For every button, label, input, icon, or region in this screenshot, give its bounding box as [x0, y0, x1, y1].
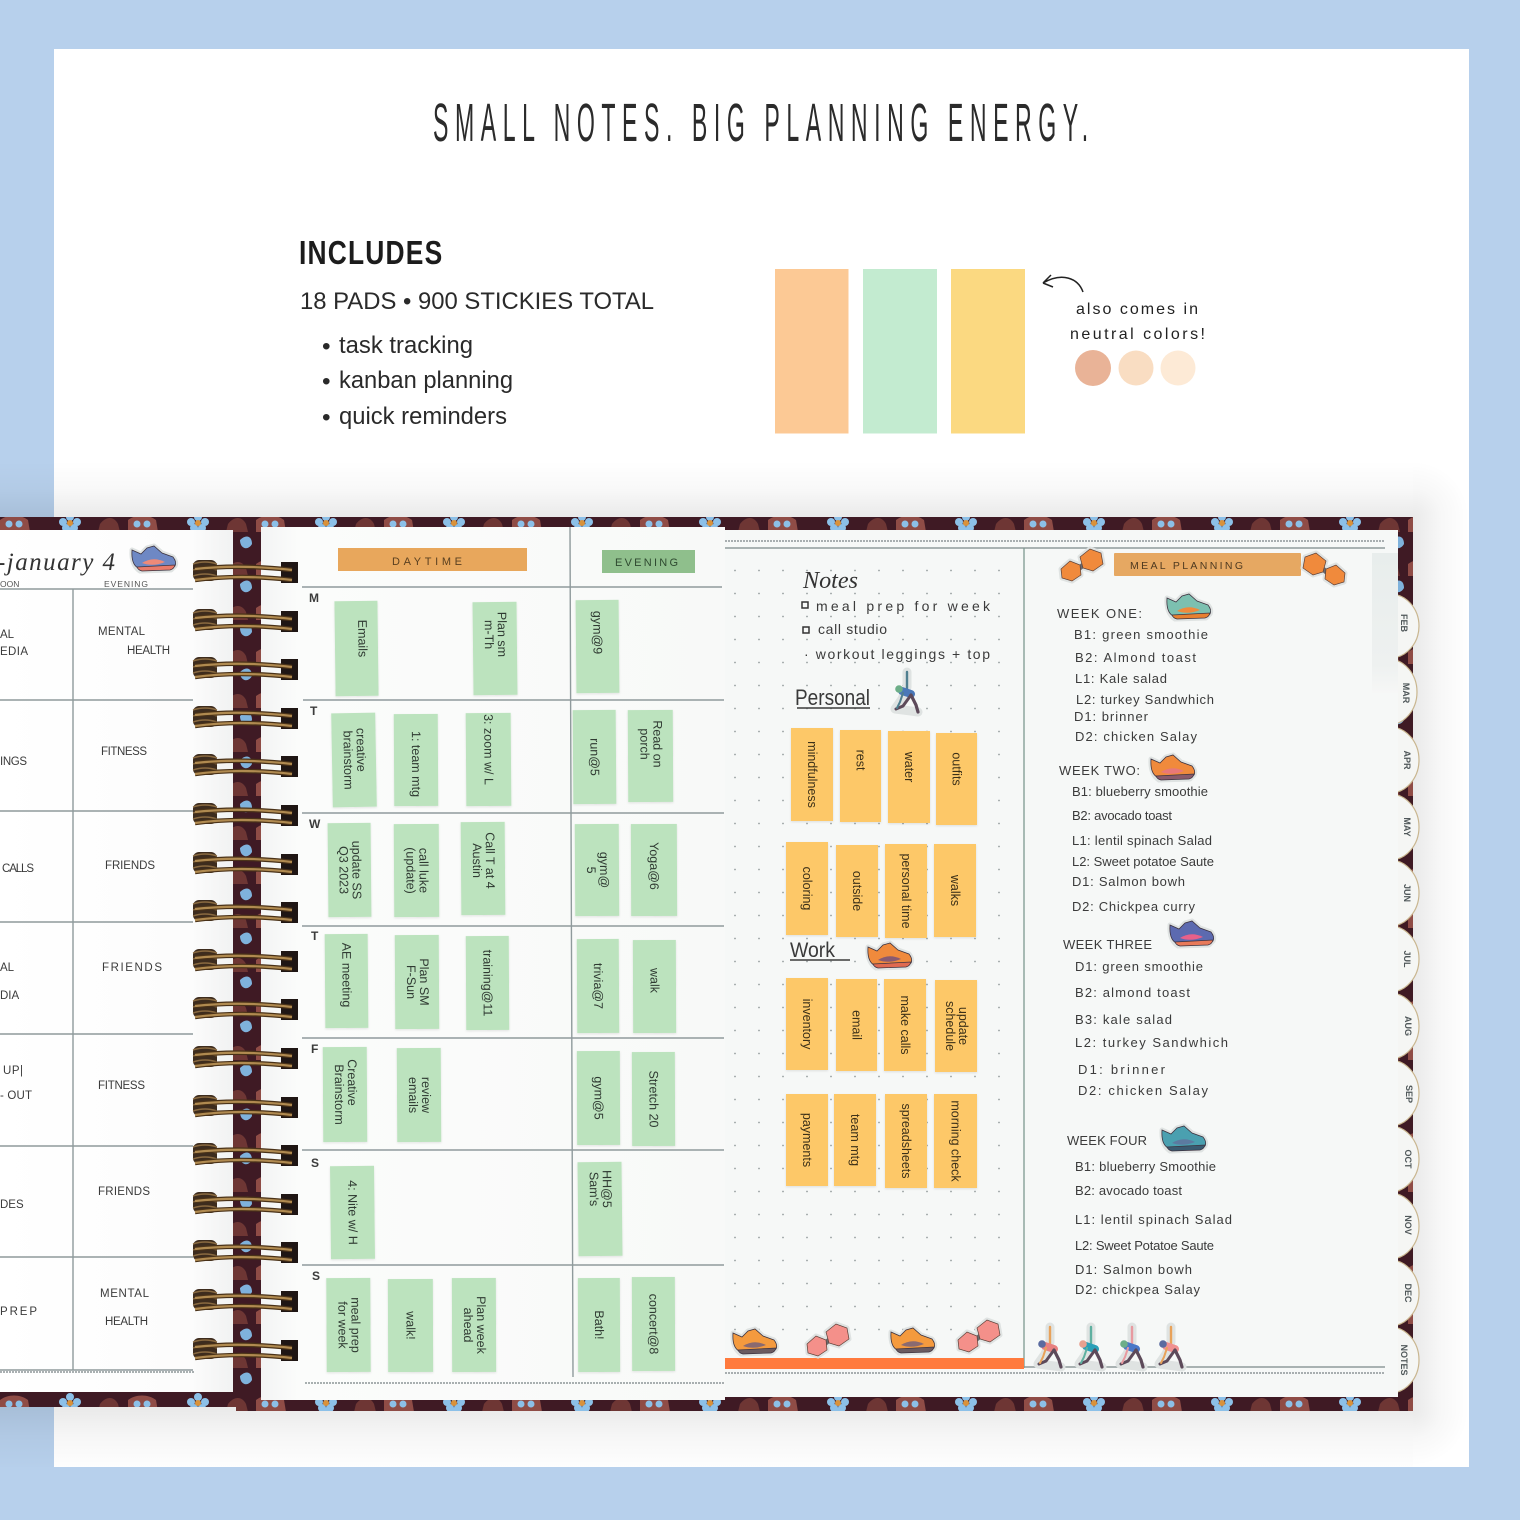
day letters: F — [311, 1042, 318, 1056]
notes list: meal prep for week — [816, 598, 991, 614]
tab labels: AUG — [1403, 1016, 1413, 1036]
meal planning header: MEAL PLANNING — [1130, 560, 1243, 572]
week one: D2: chicken Salay — [1075, 729, 1198, 744]
week four — [1067, 1133, 1232, 1297]
week two: WEEK TWO: — [1059, 763, 1140, 778]
sticky: make calls — [884, 979, 926, 1071]
sticky: team mtg: team mtg — [848, 1114, 862, 1166]
sticky: walks: walks — [948, 874, 962, 906]
bullet list: • — [322, 368, 331, 395]
sticky: payments — [786, 1094, 828, 1186]
sticky: yoga@6 — [631, 824, 677, 916]
week three: B3: kale salad — [1075, 1012, 1172, 1027]
notes list — [802, 598, 991, 662]
handwritten afternoon cells: EDIA — [0, 646, 28, 658]
sticky: outfits: outfits — [950, 752, 964, 786]
sticky: gym@5 Wed — [575, 824, 619, 916]
sticky: update schedule: update — [956, 1007, 970, 1045]
sticker: shoe — [132, 546, 176, 571]
column headings: EVENING — [104, 579, 148, 589]
week four: D2: chickpea Salay — [1075, 1282, 1200, 1297]
tab labels: OCT — [1403, 1150, 1413, 1169]
sticky: gym@5 Wed: 5 — [584, 867, 598, 874]
sticker: yoga figure two — [1079, 1327, 1102, 1367]
dot grid notes page — [723, 541, 1385, 1373]
handwritten afternoon cells: CALLS — [2, 863, 34, 875]
week two: L2: Sweet potatoe Saute — [1072, 854, 1214, 869]
sticky: Plan SM F-Sun — [395, 935, 439, 1029]
green sticky notes — [323, 600, 677, 1372]
sticky: call T at 4: Austin — [470, 843, 484, 878]
tab labels — [1399, 614, 1414, 1376]
week two: B1: blueberry smoothie — [1072, 784, 1208, 799]
sticky: zoom w/ L — [466, 713, 511, 806]
top right page shading — [1372, 553, 1398, 693]
includes heading: INCLUDES — [299, 235, 442, 272]
week three: D1: green smoothie — [1075, 959, 1203, 974]
column headings — [0, 579, 148, 589]
sticky: call Luke: (update) — [403, 847, 418, 894]
notebook shadow — [0, 461, 1469, 1467]
week one: L2: turkey Sandwhich — [1076, 692, 1214, 707]
notebook — [0, 517, 1419, 1411]
handwritten afternoon cells: PREP — [0, 1306, 37, 1318]
sticky: gym@9 — [576, 600, 619, 693]
sticky: call T at 4: Call T at 4 — [483, 832, 497, 889]
sticky: walk!: walk! — [403, 1310, 418, 1340]
sticky: creative brainstorm Fri: Brainstorm — [332, 1064, 346, 1125]
bullet list: • — [322, 404, 331, 431]
week four: B2: avocado toast — [1075, 1183, 1182, 1198]
sticky: email: email — [850, 1010, 864, 1040]
day letters: T — [310, 704, 318, 718]
sticky: email — [836, 979, 877, 1071]
pads count: 18 PADS • 900 STICKIES TOTAL — [300, 288, 654, 315]
week two: D1: Salmon bowh — [1072, 874, 1185, 889]
day letters: W — [309, 817, 321, 831]
sticky: update SS — [328, 823, 371, 917]
sticker: pink dumbbell — [807, 1324, 849, 1356]
sticky: bath!: Bath! — [592, 1310, 606, 1340]
sticky: gym@5 Wed: gym@ — [597, 852, 611, 888]
week three — [1063, 937, 1228, 1098]
bullet list: kanban planning — [339, 367, 513, 394]
sticky: team mtg — [834, 1094, 876, 1186]
sticky: trivia@7 — [577, 939, 619, 1033]
week four: L1: lentil spinach Salad — [1075, 1212, 1232, 1227]
meal planning header — [1114, 553, 1301, 576]
handwritten afternoon cells — [0, 629, 37, 1318]
tab labels: APR — [1402, 750, 1412, 770]
bullet list: • — [322, 333, 331, 360]
sticker: week three shoe — [1170, 921, 1214, 946]
sticky: HH@5 Sam's: Sam's — [587, 1172, 601, 1206]
bullet list: task tracking — [339, 332, 473, 359]
sticky: make calls: make calls — [898, 995, 912, 1055]
right cover and spine — [236, 517, 1413, 1411]
sticky: inventory: inventory — [800, 999, 814, 1050]
sticky: run@5 — [573, 710, 616, 804]
month tabs — [1359, 594, 1419, 1393]
sticky: call Luke — [394, 824, 439, 917]
handwritten evening cells: FRIENDS — [98, 1186, 150, 1198]
sticky: trivia@7: trivia@7 — [591, 963, 605, 1009]
sticker: week four shoe — [1162, 1126, 1206, 1151]
sticky: update schedule — [935, 980, 977, 1072]
sticky: morning check — [934, 1094, 977, 1188]
sticky: meal prep — [326, 1278, 371, 1372]
left cover — [0, 517, 237, 1407]
sticky: team mtg: 1: team mtg — [409, 731, 423, 797]
sticky: gym@5 Fri: gym@5 — [591, 1076, 606, 1120]
day letters — [309, 591, 321, 1283]
sticker: pink dumbbell — [958, 1320, 1000, 1352]
sticky: AE meeting — [325, 934, 368, 1028]
notes heading: Notes — [802, 568, 858, 594]
week one — [1057, 606, 1214, 744]
sticky: Emails: Emails — [355, 620, 370, 657]
week two — [1059, 763, 1214, 914]
tab labels: NOTES — [1399, 1344, 1409, 1376]
neutral colours note: also comes in — [1076, 301, 1198, 318]
bullet list: quick reminders — [339, 403, 507, 430]
sticky: payments: payments — [800, 1113, 814, 1167]
handwritten afternoon cells: DES — [0, 1199, 24, 1211]
sticky: call T at 4 — [461, 822, 505, 915]
sticky: training@11: training@11 — [480, 950, 495, 1016]
sticky: review emails: review — [419, 1077, 433, 1114]
sticky: mindfulness: mindfulness — [805, 741, 819, 808]
sticky: Emails — [334, 601, 379, 696]
sticky: Plan SM F-Sun: F-Sun — [404, 965, 418, 999]
sticky: stretch 20: Stretch 20 — [646, 1070, 661, 1128]
right page — [725, 530, 1398, 1397]
sticky: review emails: emails — [406, 1077, 420, 1113]
week four: L2: Sweet Potatoe Saute — [1075, 1238, 1214, 1253]
sticky: creative brainstorm Fri — [323, 1047, 367, 1142]
work heading: Work — [790, 939, 835, 962]
week two: B2: avocado toast — [1072, 808, 1172, 823]
sticky: run@5: run@5 — [587, 738, 602, 776]
sticky: Plan SM: m-Th — [482, 620, 496, 649]
sticky: bath! — [578, 1278, 620, 1372]
centre weekly page — [302, 527, 725, 1383]
week three: D2: chicken Salay — [1078, 1083, 1208, 1098]
sticky: coloring — [786, 842, 828, 935]
sticky: read on porch: porch — [637, 728, 652, 760]
sticky: walks — [934, 844, 976, 937]
sticky: HH@5 Sam's — [578, 1162, 622, 1256]
week one: B2: Almond toast — [1075, 650, 1196, 665]
tab labels: MAR — [1401, 683, 1411, 704]
centre page — [261, 527, 725, 1400]
sticky: plan week ahead: ahead — [461, 1308, 475, 1342]
handwritten evening cells: FITNESS — [98, 1080, 145, 1092]
date heading: -january 4 — [0, 549, 115, 576]
sticky: water: water — [902, 751, 916, 782]
sticky: creative brainstorm — [331, 713, 377, 807]
handwritten evening cells: MENTAL — [100, 1288, 150, 1300]
handwritten evening cells: FITNESS — [101, 746, 147, 758]
tab labels: FEB — [1399, 614, 1409, 633]
sticky: meal prep: meal prep — [348, 1297, 363, 1353]
sticky: nite w/ H — [330, 1166, 375, 1259]
sticker: yoga figure one — [1038, 1327, 1061, 1367]
orange footer bar — [725, 1358, 1024, 1369]
sticky: training@11 — [466, 936, 509, 1030]
sticker: orange shoe — [733, 1329, 777, 1354]
sticky: walk! — [388, 1279, 433, 1372]
handwritten afternoon cells: UP| — [3, 1065, 23, 1077]
sticky: creative brainstorm Fri: Creative — [345, 1059, 359, 1106]
day letters: M — [309, 591, 319, 605]
neutral colour dots — [1075, 350, 1196, 386]
weekly grid — [302, 527, 724, 1377]
sticky: concert@8 — [632, 1277, 675, 1371]
sticky: AE meeting: AE meeting — [339, 943, 354, 1007]
sticker: work shoe — [868, 943, 912, 968]
sticky: outside — [836, 845, 878, 937]
sticky: update schedule: schedule — [943, 1001, 957, 1051]
week two: D2: Chickpea curry — [1072, 899, 1196, 914]
notes list: · workout leggings + top — [804, 646, 990, 662]
handwritten afternoon cells: AL — [0, 629, 15, 641]
meal planning page — [1038, 549, 1345, 1367]
sticky: Plan SM F-Sun: Plan SM — [417, 958, 431, 1006]
sticky: meal prep: for week — [335, 1301, 350, 1349]
tab labels: SEP — [1404, 1085, 1414, 1103]
week three: L2: turkey Sandwhich — [1075, 1035, 1228, 1050]
sticky: team mtg — [394, 714, 438, 806]
bullet list — [322, 332, 513, 431]
sticker: yoga figure three — [1120, 1327, 1143, 1367]
sticky: mindfulness — [791, 728, 833, 821]
handwritten evening cells: FRIENDS — [102, 962, 162, 974]
dot grid — [723, 559, 1011, 1349]
week four: B1: blueberry Smoothie — [1075, 1159, 1216, 1174]
handwritten evening cells: HEALTH — [127, 645, 170, 657]
week four: D1: Salmon bowh — [1075, 1262, 1192, 1277]
sticker: left dumbbell — [1061, 549, 1103, 581]
notes list: call studio — [818, 621, 887, 637]
sticky: rest: rest — [854, 750, 868, 771]
handwritten afternoon cells: INGS — [0, 756, 27, 768]
sticky: Plan SM — [473, 602, 517, 695]
tab labels: MAY — [1402, 817, 1412, 837]
handwritten afternoon cells: - OUT — [0, 1090, 32, 1102]
sticker: yoga figure four — [1159, 1327, 1182, 1367]
sticky: spreadsheets: spreadsheets — [899, 1103, 913, 1179]
week three: B2: almond toast — [1075, 985, 1190, 1000]
week one: D1: brinner — [1074, 709, 1149, 724]
week two: L1: lentil spinach Salad — [1072, 833, 1212, 848]
daytime header — [338, 548, 527, 571]
sticker: week two shoe — [1151, 755, 1195, 780]
sticker: week one shoe — [1167, 594, 1211, 619]
sticky: nite w/ H: 4: Nite w/ H — [345, 1180, 360, 1245]
handwritten evening cells: MENTAL — [98, 626, 146, 638]
sticky: stretch 20 — [632, 1052, 675, 1146]
column headings: OON — [0, 579, 19, 589]
week three: D1: brinner — [1078, 1062, 1166, 1077]
sticky: gym@5 Fri — [577, 1051, 620, 1145]
arrow — [1043, 275, 1083, 292]
daytime header: DAYTIME — [392, 556, 462, 568]
day letters: S — [311, 1156, 319, 1170]
tab labels: DEC — [1403, 1283, 1413, 1303]
personal heading: Personal — [795, 685, 870, 710]
sticky: inventory — [786, 978, 828, 1070]
page rules — [725, 541, 1385, 1373]
tab labels: NOV — [1403, 1215, 1413, 1235]
spiral binding — [193, 560, 298, 1361]
sticky: review emails — [397, 1048, 441, 1142]
sticky: coloring: coloring — [800, 867, 814, 910]
sticky: outfits — [936, 733, 977, 825]
sticky: personal time — [885, 844, 927, 938]
handwritten evening cells: HEALTH — [105, 1316, 148, 1328]
sticker: yoga figure — [895, 672, 918, 712]
sticker: orange shoe — [891, 1328, 935, 1353]
sticky: morning check: morning check — [948, 1100, 962, 1182]
sticker: right dumbbell — [1303, 553, 1345, 585]
sticky: gym@9: gym@9 — [590, 611, 605, 654]
colour swatches — [775, 269, 1025, 434]
sticky: outside: outside — [850, 871, 864, 911]
neutral colours note — [1070, 301, 1205, 343]
day letters: S — [312, 1269, 320, 1283]
sticky: Plan SM: Plan sm — [495, 612, 509, 657]
neutral colours note: neutral colors! — [1070, 326, 1205, 343]
sticky: water — [888, 731, 930, 823]
left page — [0, 530, 233, 1392]
handwritten evening cells — [98, 626, 170, 1328]
grid — [0, 589, 193, 1370]
tab labels: JUN — [1402, 884, 1412, 902]
sticky: zoom w/ L: 3: zoom w/ L — [481, 714, 496, 785]
evening header — [602, 550, 695, 573]
sticky: read on porch: Read on — [650, 720, 665, 768]
sticky: spreadsheets — [885, 1094, 927, 1188]
handwritten evening cells: FRIENDS — [105, 860, 155, 872]
sticky: creative brainstorm: creative — [353, 728, 368, 772]
sticky: update SS: Q3 2023 — [336, 846, 351, 894]
week three: WEEK THREE — [1063, 937, 1152, 952]
sticky: plan week ahead: Plan week — [474, 1296, 488, 1355]
handwritten afternoon cells: DIA — [0, 990, 20, 1002]
sticky: rest — [840, 730, 881, 822]
sticky: yoga@6: Yoga@6 — [647, 842, 661, 890]
left planner page — [0, 546, 195, 1372]
sticky: concert@8: concert@8 — [646, 1294, 661, 1354]
sticky: update SS: update SS — [349, 841, 364, 899]
sticky: personal time: personal time — [899, 853, 913, 929]
week one: B1: green smoothie — [1074, 627, 1208, 642]
sticky: walk: walk — [647, 967, 662, 994]
evening header: EVENING — [615, 557, 678, 569]
week one: WEEK ONE: — [1057, 606, 1142, 621]
title: SMALL NOTES. BIG PLANNING ENERGY. — [433, 93, 1088, 153]
sticky: read on porch — [628, 710, 673, 802]
yellow sticky notes — [786, 728, 977, 1188]
sticky: walk — [633, 940, 676, 1033]
sticky: call Luke: call luke — [416, 848, 431, 893]
sticky: HH@5 Sam's: HH@5 — [600, 1170, 614, 1208]
sticky: creative brainstorm: brainstorm — [340, 730, 356, 790]
handwritten afternoon cells: AL — [0, 962, 15, 974]
day letters: T — [311, 929, 319, 943]
tab labels: JUL — [1402, 950, 1412, 968]
week one: L1: Kale salad — [1075, 671, 1167, 686]
week four: WEEK FOUR — [1067, 1133, 1147, 1148]
sticky: plan week ahead — [452, 1278, 496, 1372]
